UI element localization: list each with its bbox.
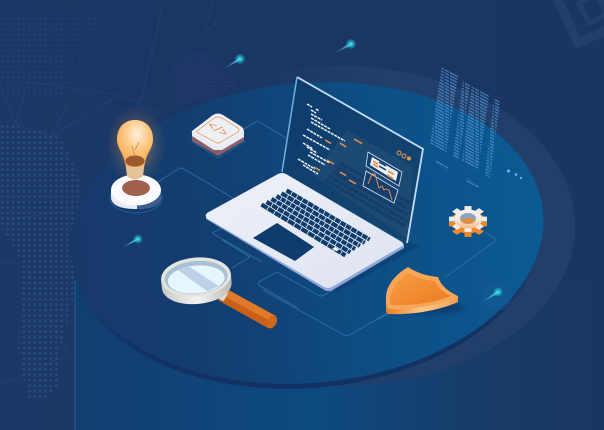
keyboard reflection bbox=[325, 163, 410, 226]
code lines bbox=[298, 104, 362, 184]
magnifier handle bbox=[217, 288, 279, 330]
laptop screen bbox=[282, 77, 423, 243]
world map dots bbox=[0, 13, 240, 400]
laptop bbox=[206, 77, 423, 292]
bulb stem bbox=[125, 160, 145, 180]
corner square icon bbox=[557, 0, 604, 43]
spark: left bbox=[120, 234, 143, 249]
widget: line chart bbox=[363, 171, 398, 203]
disc halo bbox=[105, 66, 575, 386]
circuit lines bbox=[158, 122, 497, 336]
widget: dashboard card bbox=[366, 152, 402, 186]
icon: magnifying glass bbox=[159, 255, 279, 330]
bulb glass bbox=[117, 120, 153, 167]
main disc bbox=[58, 63, 556, 403]
laptop base bbox=[206, 173, 404, 291]
network lines bbox=[0, 4, 220, 385]
spark: top centre bbox=[333, 38, 356, 54]
bulb base ring bbox=[110, 174, 162, 213]
spark: right bbox=[481, 281, 512, 311]
keyboard bbox=[262, 190, 370, 255]
lower floor gradient bbox=[74, 280, 604, 430]
magnifier rim bbox=[159, 255, 233, 307]
trackpad bbox=[253, 223, 314, 261]
data columns bbox=[430, 66, 500, 189]
icon: shield bbox=[386, 267, 464, 314]
status dots bbox=[507, 170, 522, 179]
icon: gear bbox=[449, 206, 487, 237]
magnifier lens bbox=[167, 263, 226, 296]
spark: top left bbox=[223, 54, 246, 69]
laptop shadow bbox=[218, 224, 420, 292]
icon: light bulb bbox=[106, 105, 166, 213]
disc shadow bbox=[58, 68, 556, 408]
chip code symbol: </> bbox=[204, 120, 233, 139]
icon: code chip bbox=[191, 114, 246, 158]
status lights bbox=[397, 151, 411, 160]
